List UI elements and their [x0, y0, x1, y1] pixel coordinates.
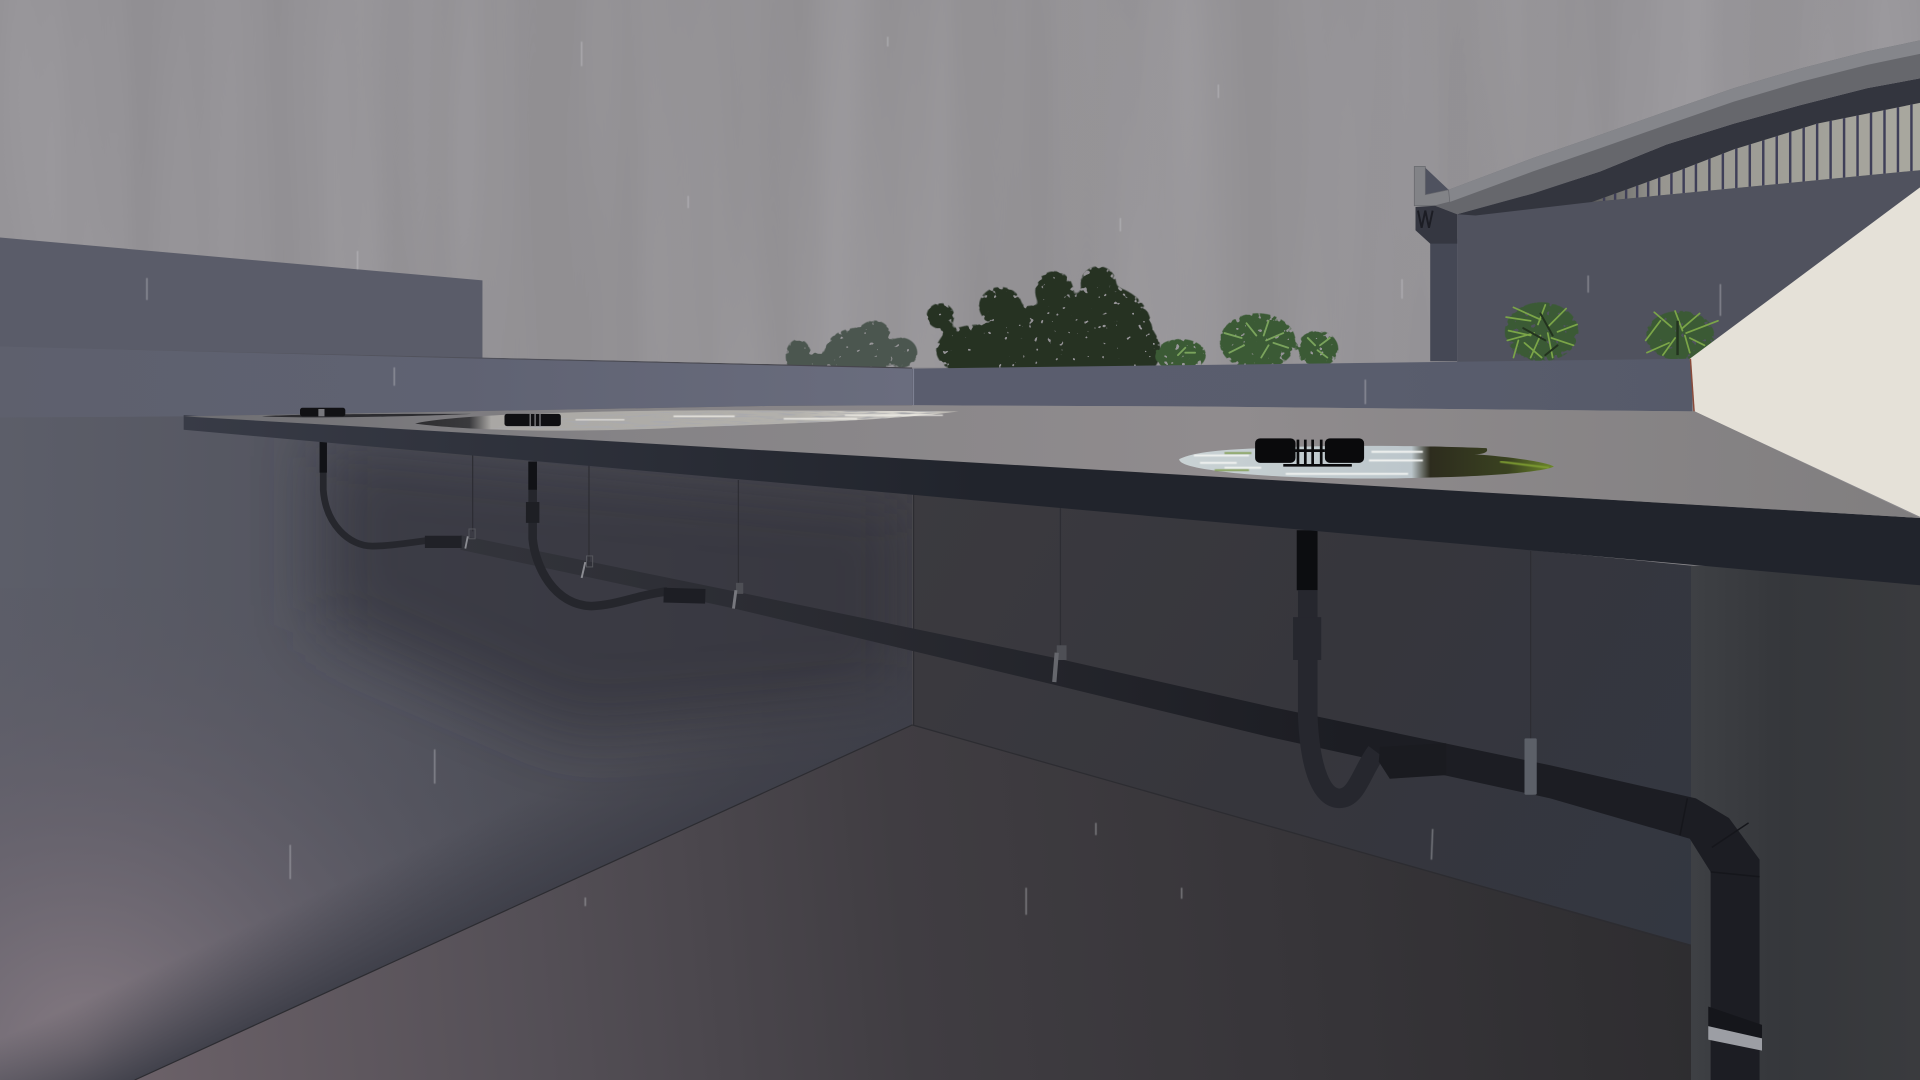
left interior wall [0, 347, 912, 1080]
right interior wall [1691, 566, 1920, 1080]
building wall [1457, 78, 1920, 362]
floor edge lines [135, 725, 1690, 1080]
slab top surface [184, 405, 1920, 518]
downpipe clamp [1708, 1007, 1762, 1051]
floor [135, 725, 1693, 1080]
roof top strip [1449, 40, 1920, 202]
pipe clamp 3 [733, 583, 743, 609]
drain tail 2 [533, 462, 705, 606]
puddle 2 with drain [415, 410, 959, 431]
cream wall edge [1690, 359, 1694, 411]
pipe clamp 4 [1054, 645, 1067, 682]
right parapet wall run [912, 359, 1692, 411]
shrub: building right [1646, 311, 1718, 358]
slab fascia [184, 415, 1920, 585]
horizontal drain pipe and downpipe [460, 535, 1760, 1080]
drain tail 3 [1307, 530, 1376, 798]
tee fitting [1379, 743, 1446, 779]
drain tail 1 [323, 441, 462, 546]
pipe clamp 5 [1524, 738, 1537, 795]
warehouse building [1414, 40, 1920, 362]
louvre band lit [1592, 103, 1920, 202]
sky [0, 0, 1920, 367]
louvre band dark [1457, 78, 1920, 216]
pipe clamp 1 [465, 529, 475, 549]
tree: distant left [789, 323, 915, 372]
puddle 3 with drain [1179, 438, 1554, 479]
rain streak on drain 1 [319, 457, 321, 523]
end bracket [1425, 168, 1449, 196]
rear interior wall [912, 490, 1692, 948]
shrub: building left [1506, 305, 1577, 359]
parapet joint [912, 369, 914, 407]
upper left parapet wall [0, 238, 482, 360]
hanger rods [473, 451, 1531, 740]
tree: large dark [929, 269, 1157, 372]
puddle 1 with drain [262, 408, 471, 417]
rain streaks [147, 37, 1720, 915]
elbow joint lines [1680, 798, 1760, 877]
pipe clamp 2 [582, 556, 593, 578]
column [1430, 239, 1457, 361]
end cap [1414, 167, 1450, 206]
shrub: small between trees [1157, 342, 1204, 369]
wall corner line [912, 490, 914, 725]
shrub: green centre [1178, 316, 1336, 367]
left parapet wall run [0, 347, 912, 418]
truss [1416, 206, 1457, 244]
louvre stripes [1602, 104, 1913, 201]
curved roof fascia [1435, 40, 1920, 214]
cream wall at right [1690, 187, 1920, 517]
